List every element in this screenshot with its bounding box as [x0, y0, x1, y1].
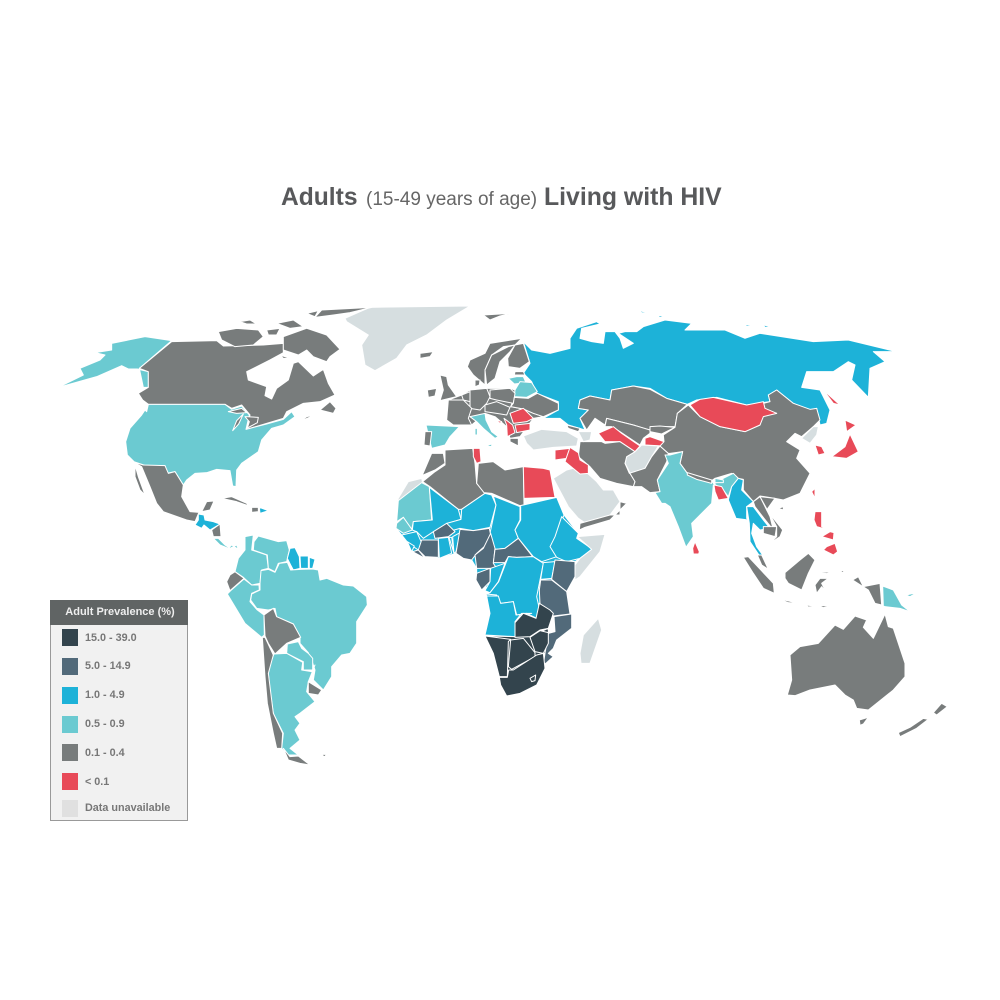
region: Africa and Arabia [396, 448, 627, 696]
legend item 5.0 - 14.9 [62, 658, 131, 675]
title: Living with HIV [544, 184, 722, 211]
legend header [50, 600, 188, 625]
title: (15-49 years of age) [366, 189, 537, 210]
region: North America [58, 306, 470, 537]
legend item data unavailable [62, 800, 170, 817]
legend item 5.0 - 14.9: 5.0 - 14.9 [85, 660, 131, 672]
legend item 0.1 - 0.4 [62, 744, 125, 761]
legend header: Adult Prevalence (%) [65, 606, 175, 618]
legend item 15.0 - 39.0: 15.0 - 39.0 [85, 632, 137, 644]
legend item 1.0 - 4.9 [62, 687, 125, 704]
region: South and East Asia [625, 310, 858, 557]
legend item 0.5 - 0.9: 0.5 - 0.9 [85, 718, 125, 730]
legend item 0.5 - 0.9 [62, 716, 125, 733]
legend [50, 600, 188, 820]
region: Europe, Russia and Central Asia [420, 313, 897, 487]
legend item 1.0 - 4.9: 1.0 - 4.9 [85, 689, 125, 701]
region: South America [213, 535, 367, 790]
legend item 0.1 - 0.4: 0.1 - 0.4 [85, 747, 125, 759]
world map [58, 306, 947, 790]
legend panel [50, 600, 188, 820]
region: Southeast Asia and Oceania [743, 553, 947, 737]
legend item 15.0 - 39.0 [62, 629, 137, 646]
title: Adults [281, 184, 358, 211]
legend item under 0.1 [62, 773, 109, 790]
legend item under 0.1: < 0.1 [85, 776, 109, 788]
legend item data unavailable: Data unavailable [85, 802, 170, 814]
